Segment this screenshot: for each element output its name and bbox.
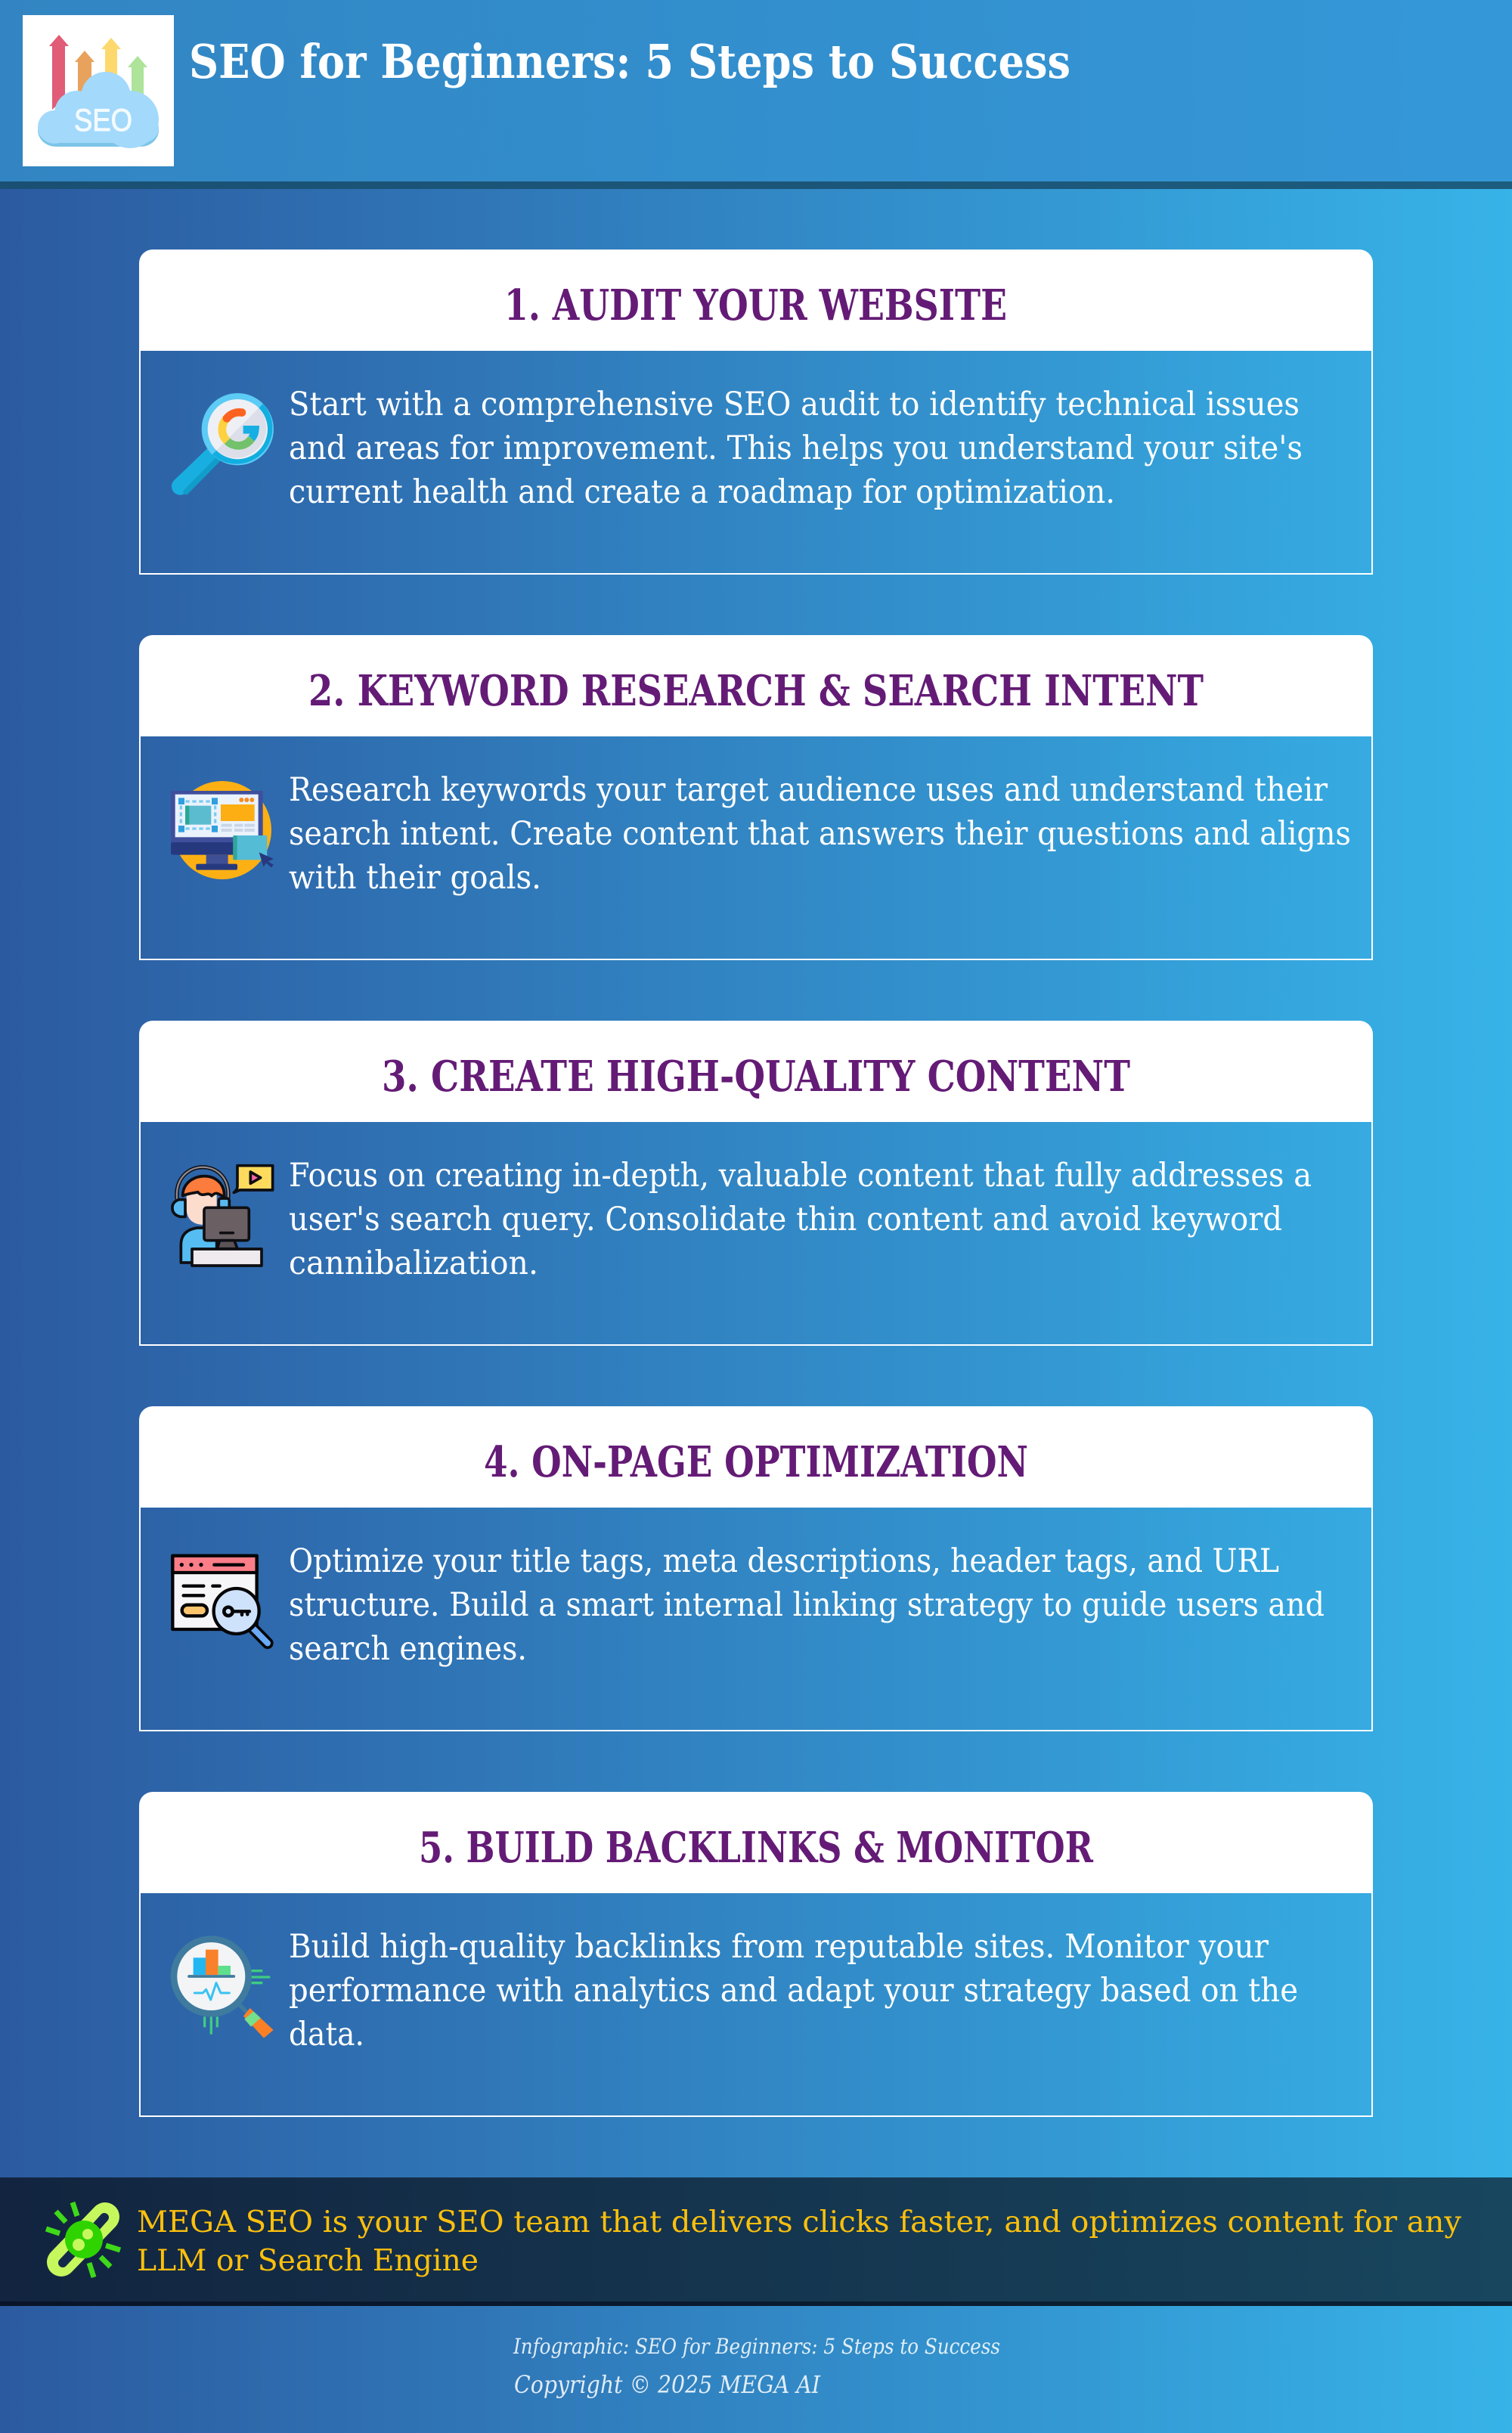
text: step 5 body: [289, 1928, 1298, 2053]
heading: step 3: 3. CREATE HIGH-QUALITY CONTENT: [382, 1052, 1130, 1102]
text: step 1 body: Start with a comprehensive SEO audit to identify technical issues: [289, 386, 1300, 423]
text: step 1 body: and areas for improvement. This helps you understand your site's: [289, 429, 1303, 467]
text: promo message: [137, 2205, 1461, 2278]
panel: step 2 keyword research: [139, 635, 1373, 959]
text: step 2 body: with their goals.: [289, 859, 541, 897]
icon: browser window with key magnifier: [172, 1556, 268, 1643]
text: step 4 body: [289, 1542, 1325, 1668]
header bar: [0, 0, 1512, 189]
icon: person with headset at computer: [172, 1166, 273, 1266]
footer credits: Infographic: SEO for Beginners: 5 Steps to Success: [513, 2334, 1000, 2359]
banner: MEGA SEO promo: [0, 2177, 1512, 2306]
heading: step 2: 2. KEYWORD RESEARCH & SEARCH INTENT: [308, 666, 1204, 716]
panel: step 1 audit your website: [139, 249, 1373, 574]
text: step 3 body: [289, 1157, 1312, 1282]
text: step 5 body: Build high-quality backlinks from reputable sites. Monitor your: [289, 1928, 1269, 1966]
icon: magnifier with G: [180, 393, 274, 492]
text: step 1 body: [289, 386, 1303, 511]
footer credits: [513, 2334, 1000, 2399]
text: step 3 body: Focus on creating in-depth, valuable content that fully addresses a: [289, 1157, 1312, 1195]
text: step 3 body: cannibalization.: [289, 1244, 538, 1282]
text: step 5 body: data.: [289, 2016, 364, 2053]
text: step 5 body: performance with analytics and adapt your strategy based on the: [289, 1972, 1298, 2010]
panel: step 4 on-page optimization: [139, 1406, 1373, 1731]
text: step 4 body: search engines.: [289, 1630, 527, 1668]
panel: step 3 create content: [139, 1021, 1373, 1345]
panel: step 5 backlinks and monitor: [139, 1792, 1373, 2116]
text: step 4 body: Optimize your title tags, meta descriptions, header tags, and URL: [289, 1542, 1279, 1580]
icon: monitor and cursor: [171, 781, 274, 879]
heading: step 5: 5. BUILD BACKLINKS & MONITOR: [419, 1823, 1093, 1873]
text: step 2 body: search intent. Create content that answers their questions and aligns: [289, 815, 1351, 853]
heading: step 4: 4. ON-PAGE OPTIMIZATION: [484, 1437, 1028, 1487]
logo: SEO cloud with arrows: SEO: [74, 102, 132, 138]
text: step 3 body: user's search query. Consolidate thin content and avoid keyword: [289, 1201, 1282, 1238]
text: promo message: MEGA SEO is your SEO team that delivers clicks faster, and optimizes content for any: [137, 2205, 1461, 2239]
heading: step 1: 1. AUDIT YOUR WEBSITE: [504, 280, 1007, 330]
text: step 2 body: [289, 771, 1351, 897]
text: promo message: LLM or Search Engine: [137, 2244, 479, 2278]
logo: SEO cloud with arrows: [23, 15, 174, 166]
text: step 2 body: Research keywords your target audience uses and understand their: [289, 771, 1328, 809]
footer credits: Copyright © 2025 MEGA AI: [514, 2370, 821, 2399]
page title: SEO for Beginners: 5 Steps to Success: [189, 34, 1070, 89]
icon: analytics magnifier: [174, 1939, 274, 2038]
text: step 1 body: current health and create a roadmap for optimization.: [289, 473, 1115, 511]
text: step 4 body: structure. Build a smart internal linking strategy to guide users and: [289, 1586, 1325, 1624]
icon: broken chain link: [46, 2202, 120, 2277]
